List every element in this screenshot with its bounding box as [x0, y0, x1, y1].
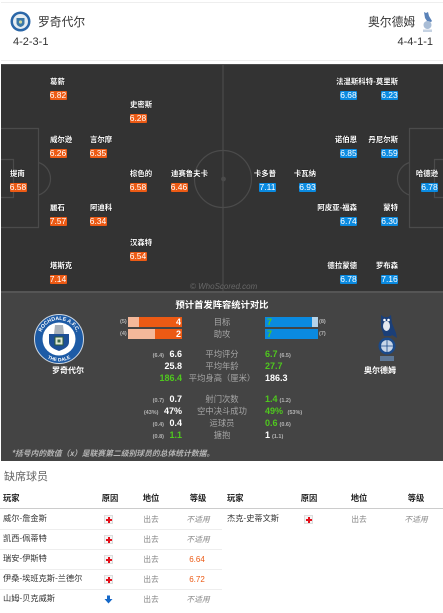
player: 罗布森: 罗布森 — [376, 260, 398, 271]
player: 诺伯恩: 诺伯恩 — [335, 134, 357, 145]
player: 麗石: 麗石 — [50, 202, 65, 213]
icon: injury — [104, 535, 113, 544]
header: player: 玩家 — [3, 492, 20, 504]
home value: (43%) 47% — [144, 406, 182, 416]
text: 6.26 — [50, 148, 66, 158]
player: 迪赛鲁夫卡 — [171, 168, 208, 192]
rating: 6.64 — [189, 555, 205, 564]
row: 杰克-史蒂文斯 — [222, 513, 443, 527]
name: 伊桑-埃班克斯-兰德尔 — [3, 572, 82, 584]
away formation: 4-4-1-1 — [398, 36, 433, 48]
header: rating right: 等级 — [408, 492, 424, 504]
header: rating: 等级 — [190, 492, 206, 504]
text: 6.68 — [340, 90, 357, 100]
text: 6.35 — [90, 148, 106, 158]
text: 6.93 — [299, 182, 316, 192]
label: 运球员 — [210, 417, 234, 429]
rating: 不适用 — [186, 594, 210, 605]
name: 杰克-史蒂文斯 — [227, 512, 279, 524]
text: 6.78 — [340, 274, 357, 284]
panel: starting lineup stats comparison — [1, 293, 443, 461]
player: 德拉蒙德 — [327, 260, 357, 284]
label: 平均评分 — [205, 348, 239, 360]
player: 塔斯克: 塔斯克 — [50, 260, 72, 271]
previous-season assists segment — [128, 329, 155, 339]
row: 瑞安-伊斯特 — [0, 553, 222, 567]
header: position: 地位 — [143, 492, 159, 504]
label: 射门次数 — [205, 393, 239, 405]
bar: goals home — [128, 317, 182, 327]
icon: Rochdale small crest — [10, 12, 30, 32]
stat: tackles — [0, 429, 443, 441]
position: 出去 — [351, 514, 367, 525]
player: 汉森特 — [130, 237, 152, 261]
text: 6.34 — [90, 216, 106, 226]
icon: injury — [104, 515, 113, 524]
text: 6.58 — [10, 182, 26, 192]
text: 6.23 — [381, 90, 398, 100]
position: 出去 — [143, 534, 159, 545]
away value: 27.7 — [265, 361, 283, 371]
away value: 49% (53%) — [265, 406, 302, 416]
text: 6.78 — [421, 182, 438, 192]
player: 言尔摩 — [90, 134, 112, 158]
watermark: © WhoScored.com — [190, 282, 257, 291]
header: match teams — [1, 2, 443, 61]
name: 凯西-佩蒂特 — [3, 532, 47, 544]
away value: 0.6 (0.6) — [265, 418, 291, 428]
player: 卡多普: 卡多普 — [254, 168, 276, 179]
home value: (6.4) 6.6 — [153, 349, 182, 359]
icon: injury — [104, 575, 113, 584]
text: 6.59 — [381, 148, 398, 158]
assists value home: 2 — [176, 329, 181, 339]
icon: down arrow — [104, 595, 113, 604]
position: 出去 — [143, 514, 159, 525]
row: 凯西-佩蒂特 — [0, 533, 222, 547]
icon: Oldham small crest — [423, 12, 432, 32]
stat: average rating — [152, 348, 291, 360]
home formation: 4-2-3-1 — [13, 36, 48, 48]
bar: goals away — [265, 317, 318, 327]
text: 7.11 — [260, 182, 275, 192]
rating: 不适用 — [186, 534, 210, 545]
previous-season goals segment — [312, 317, 318, 327]
home value: (0.4) 0.4 — [153, 418, 182, 428]
name: 山姆-贝克威斯 — [3, 592, 55, 604]
heading: missing players: 缺席球员 — [4, 468, 48, 484]
crest: Rochdale AFC: THE DALE — [48, 355, 70, 362]
player: 麗石 — [50, 202, 67, 226]
goals baseline home: (5) — [120, 319, 127, 325]
bar: assists home — [128, 329, 182, 339]
text: 6.30 — [381, 216, 398, 226]
assists value away: 7 — [267, 329, 272, 339]
player: 哈德逊 — [416, 168, 438, 192]
text: 7.16 — [381, 274, 398, 284]
player: 提南: 提南 — [10, 168, 25, 179]
away value: 1.4 (1.2) — [265, 394, 291, 404]
label: assists: 助攻 — [214, 328, 230, 340]
away value: 1 (1.1) — [265, 430, 283, 440]
home value: 186.4 — [159, 373, 182, 383]
player: 史密斯 — [130, 99, 152, 123]
player: 言尔摩: 言尔摩 — [90, 134, 112, 145]
stat: shots — [152, 393, 291, 405]
player: 丹尼尔斯: 丹尼尔斯 — [368, 134, 398, 145]
rating: 不适用 — [404, 514, 428, 525]
crest: Rochdale AFC — [34, 314, 84, 364]
stat: average age — [164, 360, 283, 372]
text: 6.85 — [340, 148, 357, 158]
stat: aerial duels won — [144, 405, 302, 417]
header: reason: 原因 — [102, 492, 118, 504]
label: 搪抱 — [214, 429, 230, 441]
text: 7.14 — [50, 274, 66, 284]
bar: assists away — [265, 329, 318, 339]
away value: 186.3 — [265, 373, 288, 383]
player: 蒙特: 蒙特 — [383, 202, 398, 213]
player: 棕色的 — [130, 168, 152, 192]
goals baseline away: (8) — [319, 319, 326, 325]
header: position right: 地位 — [351, 492, 367, 504]
player: 法温斯科特-莫里斯 — [336, 76, 398, 100]
home team name: 罗奇代尔 — [38, 13, 85, 30]
rating: 不适用 — [186, 514, 210, 525]
header: reason right: 原因 — [301, 492, 317, 504]
player: 蒙特 — [381, 202, 398, 226]
player: 阿迪科: 阿迪科 — [90, 202, 112, 213]
pitch markings — [1, 65, 443, 291]
player: 阿皮亚-福森 — [317, 202, 357, 226]
home value: (0.7) 0.7 — [153, 394, 182, 404]
rating: 6.72 — [189, 575, 205, 584]
player: 哈德逊: 哈德逊 — [416, 168, 438, 179]
player: 卡瓦纳 — [294, 168, 316, 192]
position: 出去 — [143, 554, 159, 565]
label: 平均年龄 — [205, 360, 239, 372]
name: 瑞安-伊斯特 — [3, 552, 47, 564]
stat: average height — [159, 372, 288, 384]
player: 提南 — [10, 168, 27, 192]
goals value home: 4 — [176, 317, 181, 327]
player: 棕色的: 棕色的 — [130, 168, 152, 179]
stat: dribbles — [0, 417, 443, 429]
row: 伊桑-埃班克斯-兰德尔 — [0, 573, 222, 587]
player: 威尔逊: 威尔逊 — [50, 134, 72, 145]
footnote: *括号内的数值（x）是联赛第二级别球员的总体统计数据。 — [11, 448, 214, 459]
panel: pitch — [1, 64, 443, 293]
home value: 25.8 — [164, 361, 182, 371]
crest: Rochdale AFC: ROCHDALE A.F.C. — [38, 316, 79, 332]
player: 卡多普 — [254, 168, 276, 192]
player: 汉森特: 汉森特 — [130, 237, 152, 248]
player: 阿迪科 — [90, 202, 112, 226]
home value: (0.8) 1.1 — [153, 430, 182, 440]
player: 迪赛鲁夫卡: 迪赛鲁夫卡 — [171, 168, 208, 179]
row: 山姆-贝克威斯 — [0, 593, 222, 607]
icon: injury — [304, 515, 313, 524]
stats heading: 预计首发阵容统计对比 — [176, 297, 268, 311]
away team label: 奥尔德姆 — [364, 365, 396, 376]
label: goals: 目标 — [214, 316, 230, 328]
player: 阿皮亚-福森: 阿皮亚-福森 — [317, 202, 357, 213]
assists baseline home: (4) — [120, 331, 127, 337]
away value: 6.7 (6.5) — [265, 349, 291, 359]
previous-season goals segment — [128, 317, 139, 327]
crest: Oldham Athletic — [378, 315, 397, 361]
player: 史密斯: 史密斯 — [130, 99, 152, 110]
text: 6.82 — [50, 90, 66, 100]
name: 威尔-詹金斯 — [3, 512, 47, 524]
position: 出去 — [143, 574, 159, 585]
text: 6.58 — [130, 182, 146, 192]
header: player right: 玩家 — [227, 492, 244, 504]
text: 6.28 — [130, 113, 146, 123]
home team label: 罗奇代尔 — [52, 365, 84, 376]
text: 6.54 — [130, 251, 146, 261]
text: 6.46 — [171, 182, 187, 192]
icon: injury — [104, 555, 113, 564]
player: 法温斯科特-莫里斯: 法温斯科特-莫里斯 — [336, 76, 398, 87]
player: 威尔逊 — [50, 134, 72, 158]
text: 7.57 — [50, 216, 66, 226]
label: 平均身高（厘米） — [189, 372, 255, 384]
assists baseline away: (7) — [319, 331, 326, 337]
row: 威尔-詹金斯 — [0, 513, 222, 527]
goals value away: 7 — [267, 317, 272, 327]
player: 塔斯克 — [50, 260, 72, 284]
label: 空中决斗成功 — [197, 405, 247, 417]
player: 葛薪: 葛薪 — [50, 76, 65, 87]
player: 卡瓦纳: 卡瓦纳 — [294, 168, 316, 179]
player: 罗布森 — [376, 260, 398, 284]
player: 德拉蒙德: 德拉蒙德 — [327, 260, 357, 271]
player: 丹尼尔斯 — [368, 134, 398, 158]
text: 6.74 — [340, 216, 357, 226]
player: 葛薪 — [50, 76, 67, 100]
away team name: 奥尔德姆 — [368, 13, 415, 30]
position: 出去 — [143, 594, 159, 605]
player: 诺伯恩 — [335, 134, 357, 158]
